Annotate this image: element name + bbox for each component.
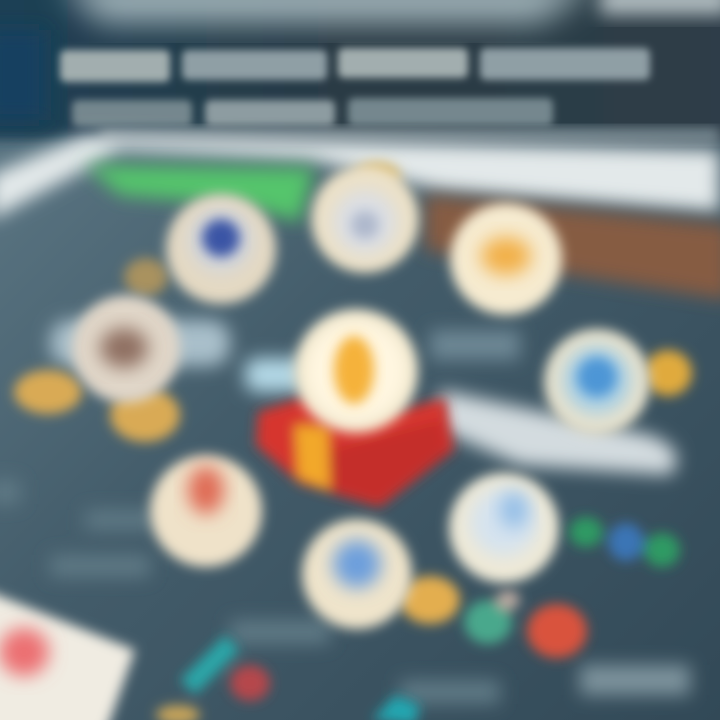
- note card: bottom left: [0, 590, 135, 720]
- blurred heading: [60, 48, 650, 126]
- icon: coloured dots row: [569, 517, 680, 567]
- icon: lower coloured dots: [464, 590, 587, 658]
- icon: red pin circle: [150, 455, 262, 567]
- icon: navy circle: [166, 194, 276, 304]
- soft text smudges: [0, 330, 690, 704]
- white sweeping band: [0, 135, 720, 220]
- icon: teal and red bottom marks: [156, 635, 420, 720]
- icon: orange circle: [450, 203, 562, 315]
- icon: red gift box: [256, 392, 454, 507]
- icon: central dollar coin: [294, 309, 418, 433]
- icon: brown circle: [72, 295, 180, 403]
- icon: yellow connector coins: [14, 162, 692, 624]
- header band: [0, 0, 720, 142]
- green patch: [85, 165, 315, 222]
- white pointer bars: [50, 320, 677, 475]
- icon: sky chart circle: [449, 473, 559, 583]
- icon: blue circle: [544, 329, 650, 435]
- icon: light grey circle: [311, 165, 419, 273]
- brown patch: [425, 195, 720, 300]
- icon: blue lower circle: [302, 519, 412, 629]
